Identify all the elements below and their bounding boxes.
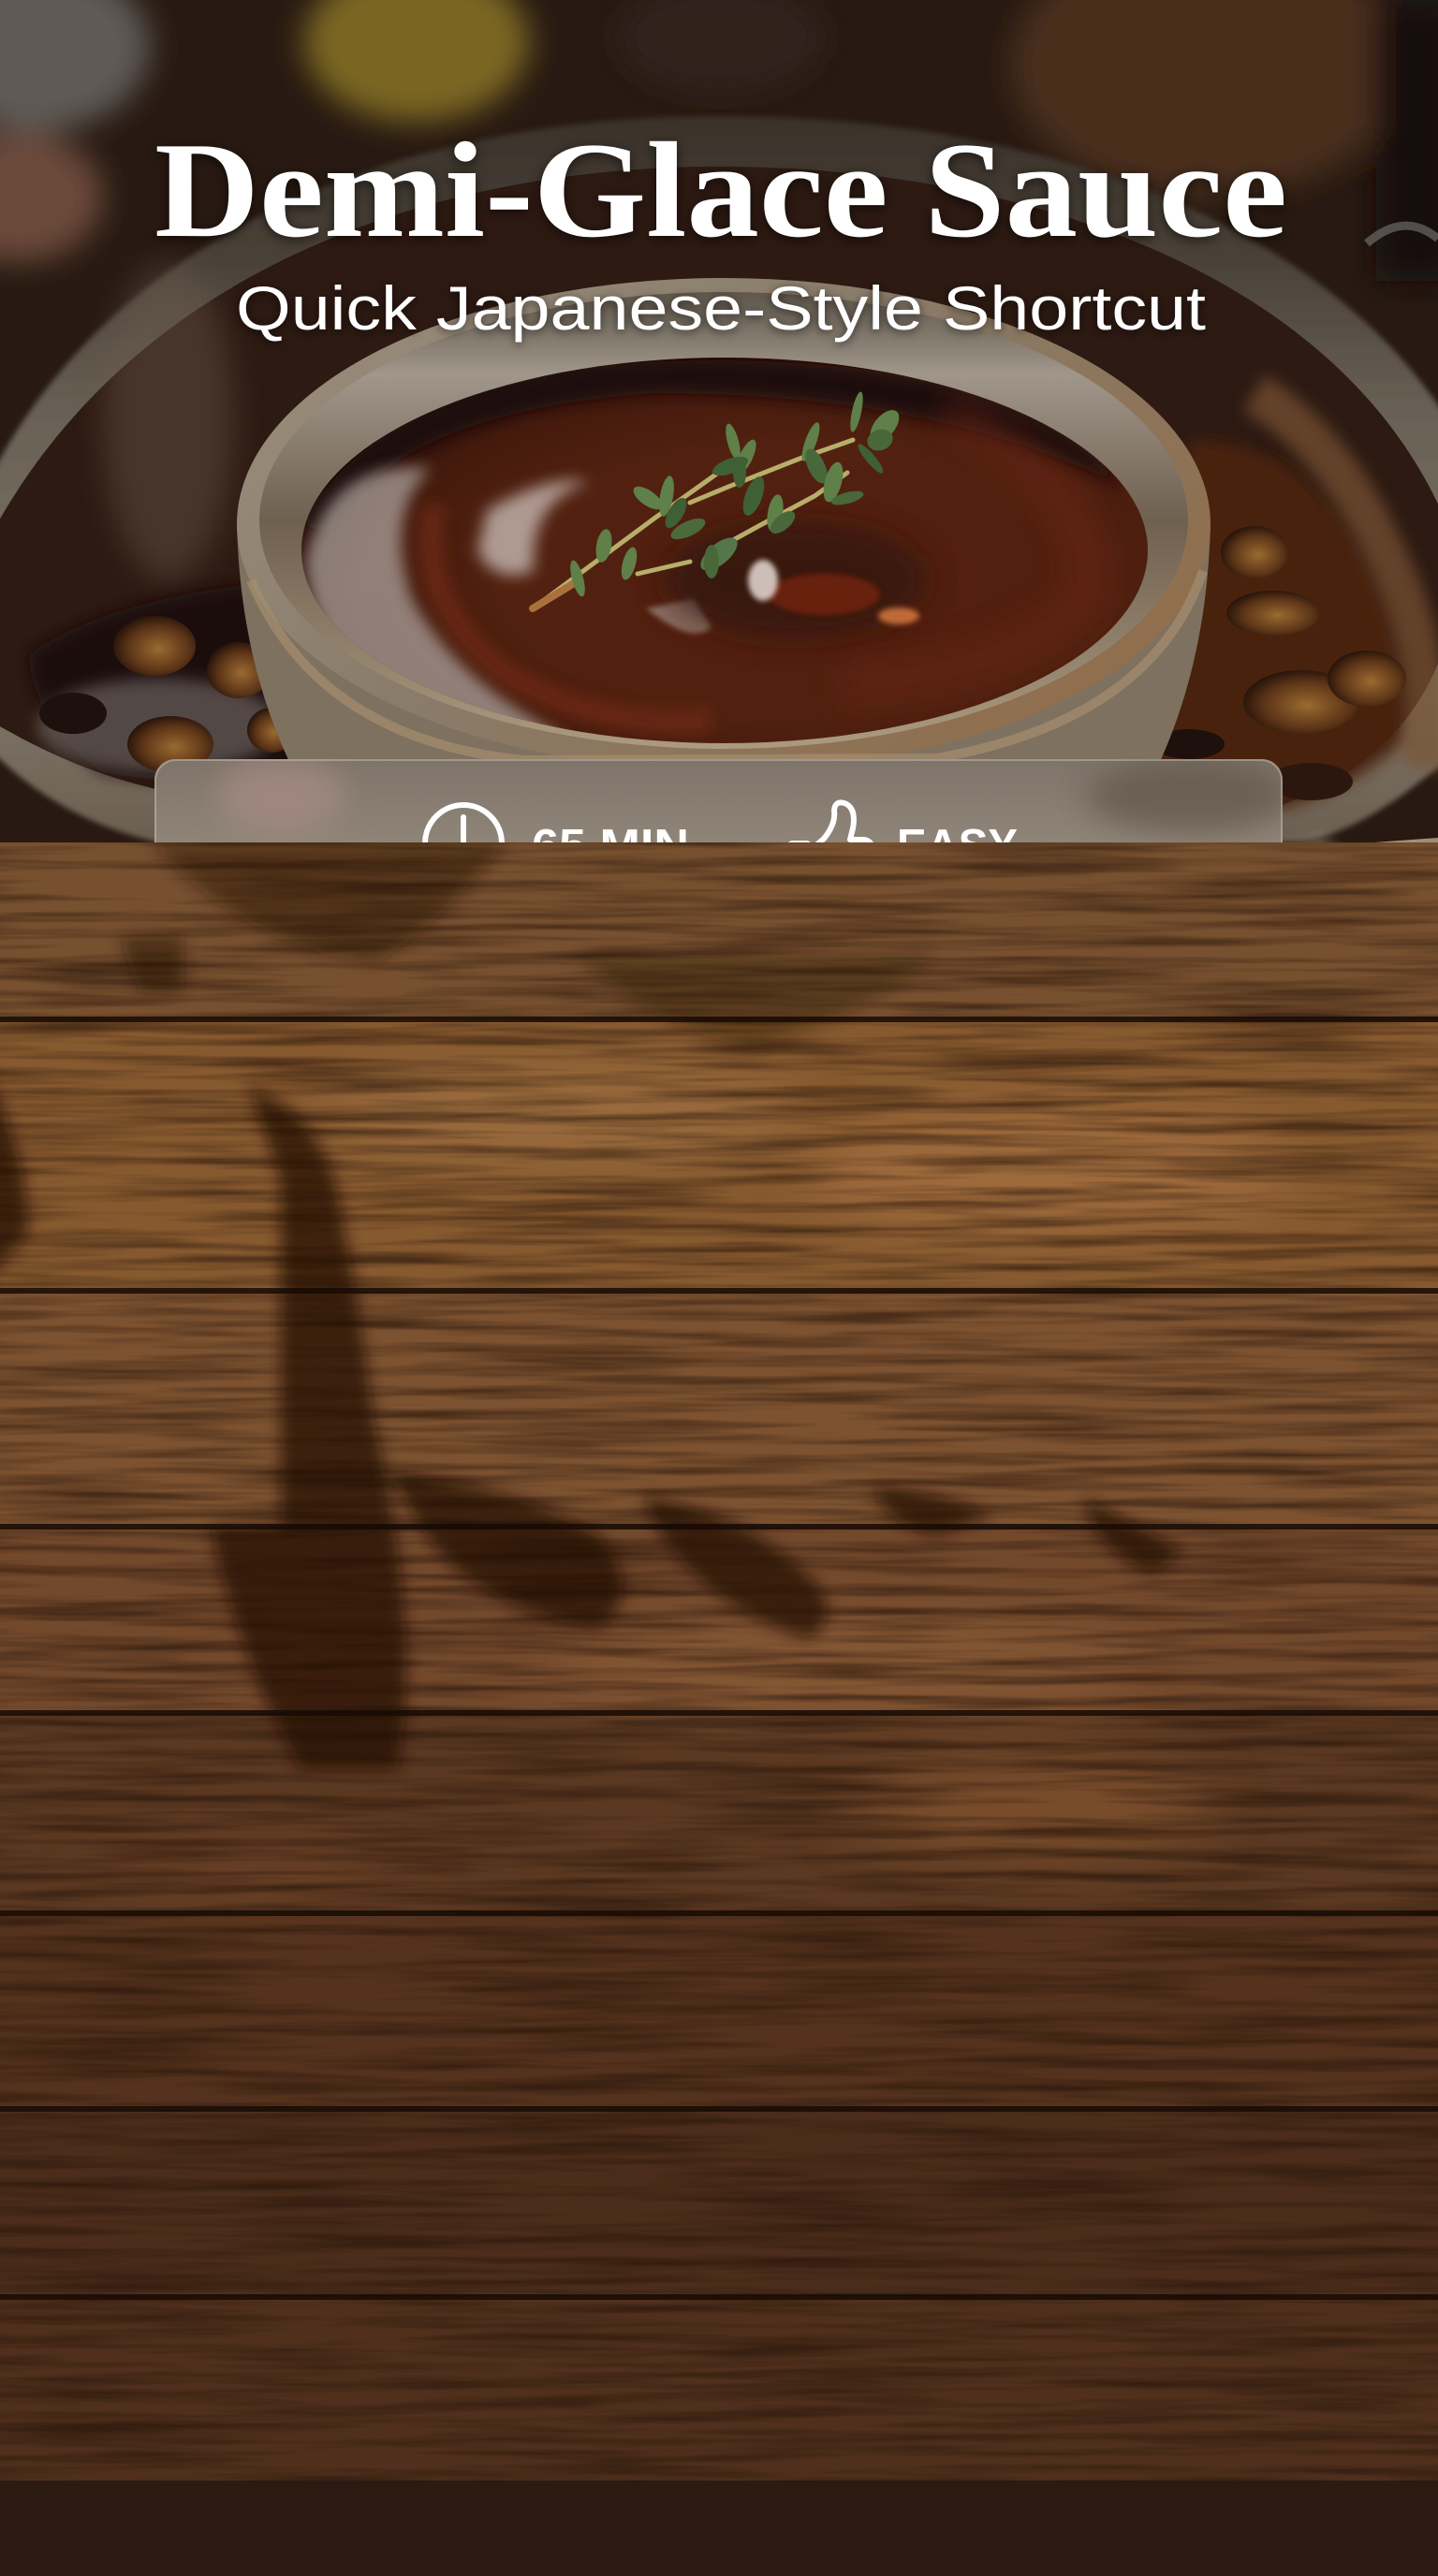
footer band [0,2462,1438,2576]
bowl: tomato sauce [572,1300,775,1503]
step text 1: Boil the red wine for [162,2307,432,2364]
wooden table background [0,842,1438,2481]
sauce surface [301,358,1148,743]
bowl [237,278,1211,759]
ingredient label: bay leaves [1185,1523,1357,1624]
hero photo: sauce bowl in pan [0,0,1438,842]
step number 1: 1 [97,2326,150,2420]
ingredient label: red wine: 150 ml [170,1559,262,1591]
ingredient label: tomato: Tomato [620,1206,723,1238]
linen towel [1294,833,1438,842]
title: Demi-Glace Sauce [154,114,1287,266]
ingredient label: sugar: Sugar [1054,1251,1131,1284]
ingredient label: soy sauce [814,1523,985,1624]
heading: instructions [496,1764,942,1839]
step text 3: Serve warm or store. [1029,2314,1303,2372]
bowl: sugar [1019,1327,1176,1486]
ingredient label: bay leaves: Bay leaves [1199,1573,1342,1606]
subtitle: Quick Japanese-Style Shortcut [236,273,1206,343]
blurred kitchen background [0,0,1438,281]
right sauce pool with bubbles [1142,393,1425,814]
heading: ingredients [514,988,925,1063]
icon: thumbs up [788,799,873,842]
bowl: soy sauce [807,1310,992,1497]
ingredient label: tomato: sauce [632,1237,711,1270]
pan [0,116,1438,842]
step text 2: ingredients for 1 hour. [595,2352,883,2386]
thyme sprig [533,390,904,608]
ingredient label: red wine: Red wine [154,1591,279,1624]
ingredient label: tonkatsu [356,1158,525,1281]
time label: 65 MIN [532,821,689,871]
ingredient label: tomato [587,1158,756,1281]
bowl: tonkatsu sauce [339,1298,537,1498]
photo: sauce over steak [942,1892,1397,2325]
step card 2 [505,1882,934,2422]
ingredient label: tonkatsu: sauce [401,1237,479,1270]
step text 1 [162,2307,434,2399]
left sauce pool with bubbles [26,582,288,790]
ingredient label: soy sauce: Soy sauce [833,1573,966,1606]
ingredient label: tonkatsu: Tonkatsu [378,1206,502,1238]
step text 2: Simmer with remaining [595,2320,910,2353]
heading: ingredients: INGREDIENTS [541,999,897,1053]
step card 1 [37,1872,506,2442]
ingredient label: tomato: 150 ml [624,1173,718,1206]
ingredient label: tonkatsu: 150 ml [393,1173,487,1206]
step number 3: 3 [961,2297,1013,2391]
bay leaves [1202,1301,1328,1498]
ingredient label: soy sauce: 75 ml [859,1541,940,1573]
red wine bottle [135,1000,286,1518]
difficulty label: EASY [897,821,1018,871]
footer band: OneTapRecipes.com [528,2504,910,2545]
step number 2: 2 [532,2309,577,2399]
heading: instructions: INSTRUCTIONS [524,1775,914,1829]
info pill: time and difficulty [154,759,1283,842]
ingredient label: red wine [132,1540,301,1641]
ingredient label: bay leaves: 2 [1262,1541,1279,1573]
plank seams [0,1019,1438,2297]
icon: clock [422,802,505,842]
photo: boiling red wine [50,1896,492,2320]
step text 2 [595,2320,910,2386]
photo: simmering sauce [524,1909,910,2303]
ingredient label: sugar [1029,1200,1156,1302]
step card 3 [932,1871,1401,2442]
ingredient label: sugar: 75 g [1063,1221,1123,1253]
step text 1: 5 minutes. [166,2353,304,2399]
steam [103,262,234,580]
tree shadows [0,842,1184,1769]
